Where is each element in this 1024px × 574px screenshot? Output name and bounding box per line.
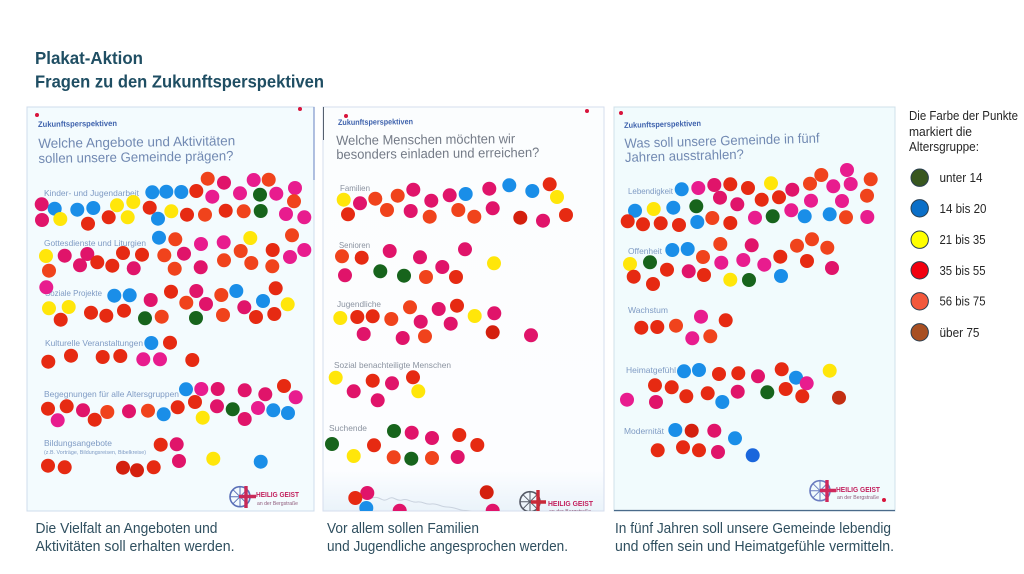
caption: Menschen: und Jugendliche angesprochen werden.	[327, 539, 568, 555]
row: Lebendigkeit	[621, 163, 878, 232]
row: Kinder- und Jugendarbeit	[35, 172, 311, 231]
row: Familien: Familien	[340, 183, 370, 193]
row: Begegnungen für alle Altersgruppen	[41, 379, 303, 427]
row: Kinder- und Jugendarbeit: Kinder- und Jugendarbeit	[44, 188, 140, 198]
panel heading	[336, 116, 539, 162]
legend item: 21 bis 35: 21 bis 35	[940, 233, 986, 247]
caption: Menschen	[327, 521, 568, 555]
panel heading: Welche Menschen möchten wir	[336, 131, 516, 148]
panel heading	[38, 117, 236, 166]
panel heading: Zukunftsperspektiven	[624, 119, 701, 130]
legend item: über 75	[911, 324, 980, 341]
row: Suchende	[325, 423, 484, 466]
legend item: 56 bis 75	[911, 293, 986, 310]
logo: Heilig Geist	[230, 486, 300, 508]
legend heading: Altersgruppe:	[909, 140, 979, 154]
legend item: 14 bis 20: 14 bis 20	[940, 202, 987, 216]
panel heading: sollen unsere Gemeinde prägen?	[38, 148, 234, 166]
legend item: unter 14: unter 14	[940, 171, 983, 185]
legend item: über 75: über 75	[940, 326, 980, 340]
logo: Heilig Geist: an der Bergstraße	[837, 495, 879, 501]
panel heading: Welche Angebote und Aktivitäten	[38, 133, 235, 151]
logo: Heilig Geist: an der Bergstraße	[549, 509, 591, 515]
panel heading	[624, 116, 820, 165]
caption: Angebote: Aktivitäten soll erhalten werden.	[36, 539, 234, 555]
caption: Ausstrahlung	[615, 521, 894, 555]
row: Kulturelle Veranstaltungen	[41, 336, 199, 369]
caption: Angebote: Die Vielfalt an Angeboten und	[36, 521, 218, 537]
legend heading: markiert die	[909, 125, 972, 139]
caption: Ausstrahlung: und offen sein und Heimatgefühle vermitteln.	[615, 539, 894, 555]
row: Senioren	[335, 240, 501, 284]
panel heading: Jahren ausstrahlen?	[625, 147, 744, 165]
row: Modernität	[624, 423, 760, 462]
panel heading: Was soll unsere Gemeinde in fünf	[624, 131, 820, 151]
legend item: 21 bis 35	[911, 231, 986, 248]
caption: Menschen: Vor allem sollen Familien	[327, 521, 479, 537]
row: Heimatgefühl	[620, 362, 846, 409]
title	[35, 48, 324, 92]
caption: Angebote	[36, 521, 234, 555]
row: Soziale Projekte	[39, 280, 295, 327]
row: Sozial benachteiligte Menschen: Sozial benachteiligte Menschen	[334, 360, 451, 370]
row: Familien	[337, 177, 573, 228]
row: Heimatgefühl: Heimatgefühl	[626, 365, 676, 375]
row: Bildungsangebote: (z.B. Vorträge, Bildungsreisen, Bibelkreise)	[44, 450, 146, 456]
row: Wachstum	[628, 305, 733, 345]
row: Modernität: Modernität	[624, 426, 665, 436]
panel: Menschen einladen und erreichen	[323, 107, 604, 518]
row: Offenheit: Offenheit	[628, 246, 663, 256]
panel: Angebote und Aktivitäten	[27, 107, 314, 511]
panel heading: besonders einladen und erreichen?	[336, 145, 539, 162]
legend item: 35 bis 55: 35 bis 55	[940, 264, 986, 278]
panel heading: Zukunftsperspektiven	[38, 119, 117, 129]
row: Wachstum: Wachstum	[628, 305, 668, 315]
row: Gottesdienste und Liturgien: Gottesdienste und Liturgien	[44, 238, 146, 248]
logo: Heilig Geist: HEILIG GEIST	[548, 501, 594, 508]
caption: Ausstrahlung: In fünf Jahren soll unsere Gemeinde lebendig	[615, 521, 891, 537]
row: Suchende: Suchende	[329, 423, 367, 433]
row: Kulturelle Veranstaltungen: Kulturelle Veranstaltungen	[45, 338, 143, 348]
row: Bildungsangebote	[41, 437, 268, 477]
logo: Heilig Geist: HEILIG GEIST	[836, 487, 881, 494]
logo: Heilig Geist	[519, 490, 593, 511]
row: Jugendliche: Jugendliche	[337, 299, 381, 309]
legend item: 56 bis 75: 56 bis 75	[940, 294, 986, 308]
row: Senioren: Senioren	[339, 240, 370, 250]
legend heading	[909, 109, 1018, 154]
legend item: 35 bis 55	[911, 262, 986, 279]
row: Gottesdienste und Liturgien	[39, 228, 311, 278]
row: Bildungsangebote: Bildungsangebote	[44, 438, 112, 448]
legend item: 14 bis 20	[911, 200, 987, 217]
handwritten addition with dots	[348, 485, 500, 511]
logo: Heilig Geist: HEILIG GEIST	[256, 492, 300, 499]
row: Lebendigkeit: Lebendigkeit	[628, 186, 674, 196]
panel: Gemeinde ausstrahlen	[614, 107, 895, 511]
logo: Heilig Geist: an der Bergstraße	[257, 501, 298, 507]
title: Fragen zu den Zukunftsperspektiven	[35, 72, 324, 92]
row: Begegnungen für alle Altersgruppen: Begegnungen für alle Altersgruppen	[44, 389, 179, 399]
row: Soziale Projekte: Soziale Projekte	[45, 288, 102, 298]
title: Plakat-Aktion	[35, 48, 143, 68]
row: Jugendliche	[333, 299, 538, 345]
legend	[909, 109, 1018, 341]
row: Sozial benachteiligte Menschen	[329, 360, 451, 407]
logo: Heilig Geist	[810, 480, 881, 502]
row: Offenheit	[623, 232, 839, 291]
panel heading: Zukunftsperspektiven	[338, 117, 413, 127]
legend item: unter 14	[911, 169, 983, 186]
